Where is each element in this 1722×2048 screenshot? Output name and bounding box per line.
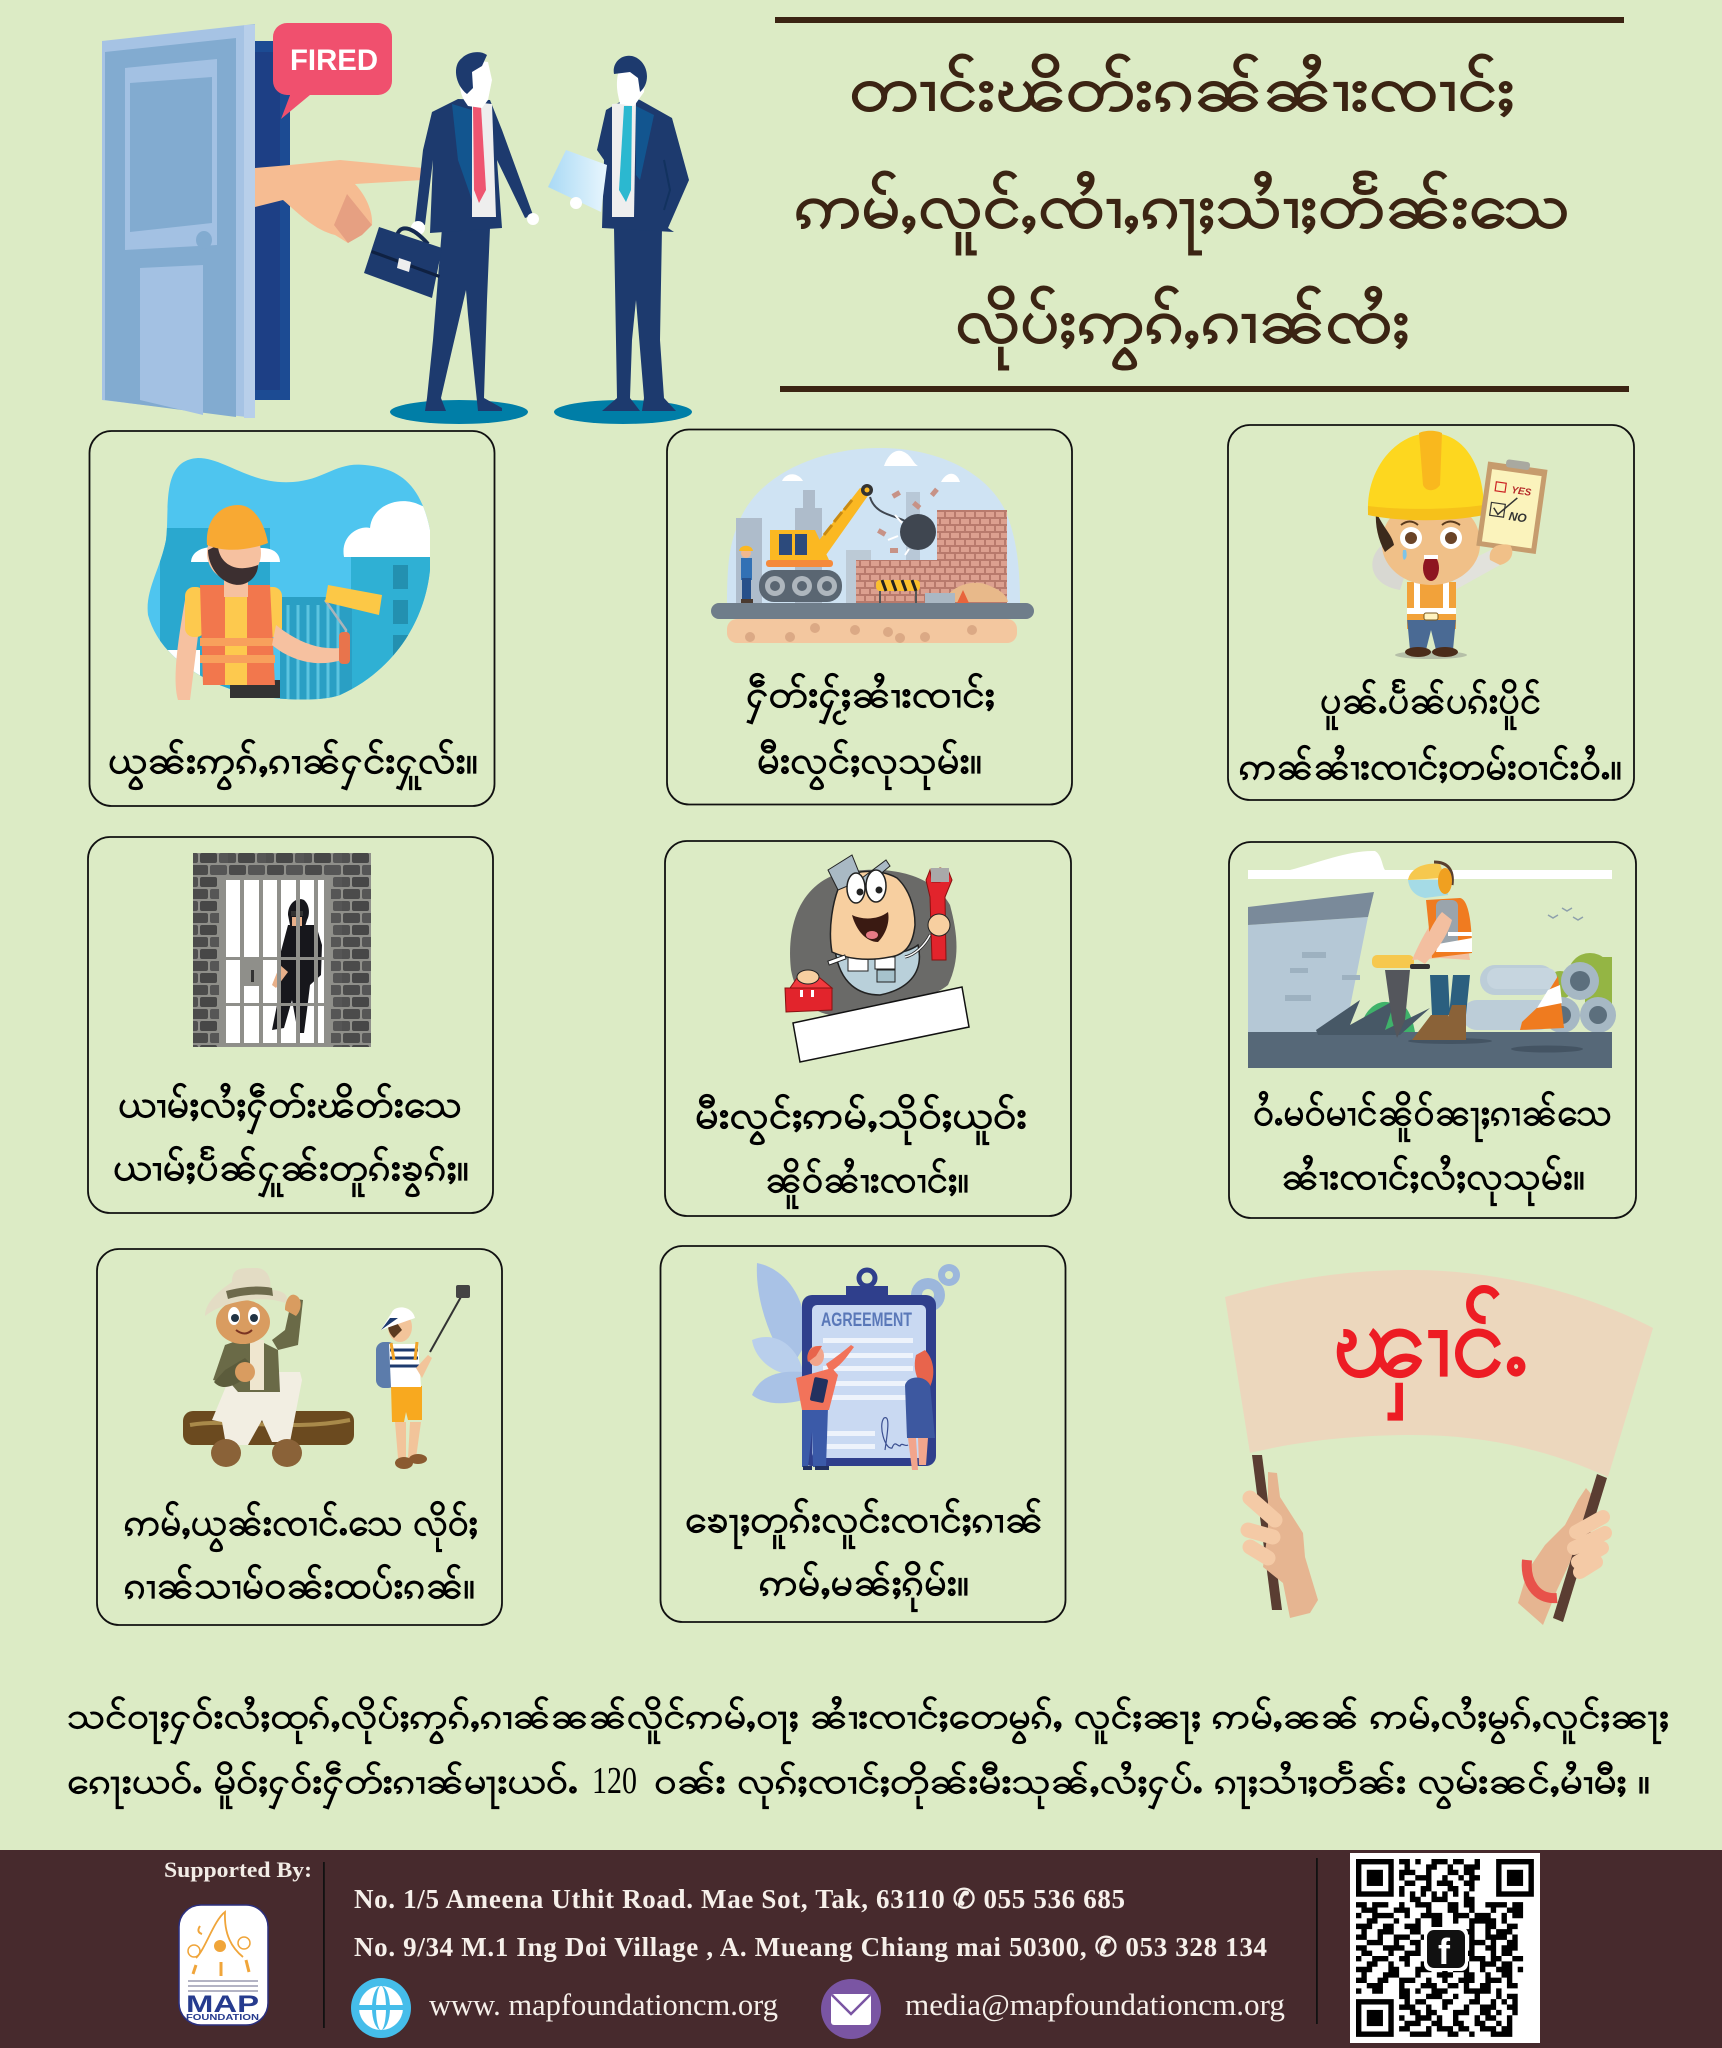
speech bubble: FIRED: FIRED <box>290 44 378 77</box>
icon: crying worker with yes no clipboard: YES <box>1511 485 1532 499</box>
right hand and pole <box>1518 1474 1607 1625</box>
left hand and pole <box>1248 1455 1318 1618</box>
text block: conclusion paragraph <box>67 1695 1669 1810</box>
speech bubble: FIRED <box>273 23 392 119</box>
banner cloth <box>1225 1270 1653 1477</box>
caption <box>113 1082 469 1198</box>
panel: rule breaking worker <box>1228 425 1634 800</box>
caption: ဢၼ်ၼၢႆးၸၢင်ႈတမ်းဝၢင်းဝႆႉ။ <box>1239 744 1622 788</box>
icon: demolition site <box>711 448 1034 643</box>
panel: prison <box>88 837 493 1213</box>
caption <box>695 1093 1027 1210</box>
panel: demolition <box>667 430 1072 804</box>
panel: explorer and tourist <box>97 1249 502 1625</box>
caption <box>1253 1090 1612 1207</box>
icon: plumber with wrench and toolbox <box>785 855 969 1062</box>
caption: မီးလွင်ႈဢမ်ႇသိုဝ်ႈယူဝ်း <box>695 1093 1027 1146</box>
address lines: No. 9/34 M.1 Ing Doi Village , A. Mueang Chiang mai 50300, ✆ 053 328 134 <box>354 1932 1267 1962</box>
caption: ယွၼ်းဢွၵ်ႇၵၢၼ်ႁင်းႁူလ်း။ <box>108 738 478 791</box>
caption: ႁဵတ်းႁႂ်ႈၼၢႆးၸၢင်ႈ <box>746 672 995 725</box>
logo: MAP Foundation: MAP <box>186 1991 259 2018</box>
caption: ၼိူဝ်ၼၢႆးၸၢင်ႈ။ <box>765 1157 969 1210</box>
QR code <box>1350 1853 1540 2043</box>
caption: ၶေႃႈတူၵ်းလူင်းၸၢင်ႈၵၢၼ် <box>685 1497 1043 1550</box>
panel: agreement <box>660 1246 1066 1622</box>
text block: conclusion paragraph: 120 <box>592 1760 637 1802</box>
banner word: ၾၢင်ႉ <box>1333 1284 1528 1421</box>
panel: roadwork <box>1229 842 1636 1218</box>
caption: ၼၢႆးၸၢင်ႈလႆႈလုသုမ်း။ <box>1281 1154 1585 1207</box>
address lines: No. 1/5 Ameena Uthit Road. Mae Sot, Tak, 63110 ✆ 055 536 685 <box>354 1884 1125 1914</box>
caption: ယၢမ်ႈပႅၼ်ႁူၼ်းတူၵ်းၶွၵ်ႈ။ <box>113 1145 469 1198</box>
panel: plumber <box>665 841 1071 1216</box>
door frame <box>255 41 290 400</box>
caption: ဝႆႉမဝ်မၢင်ၼိူဝ်ၼႃႈၵၢၼ်သေ <box>1253 1090 1612 1143</box>
title rules and heading <box>775 17 1629 392</box>
heading text: ဢမ်ႇလူင်ႇၸၢႆႇၵႃႈသၢႆႈတႅၼ်းသေ <box>794 170 1570 255</box>
icon: agreement clipboard with two people <box>752 1263 960 1470</box>
caption <box>685 1497 1043 1613</box>
caption <box>124 1500 478 1607</box>
illustration: fired employee pointed out of the door <box>102 23 692 424</box>
icon: painter worker <box>148 458 432 708</box>
address lines <box>354 1884 1267 1962</box>
panel: warning banner held by hands <box>1225 1270 1653 1625</box>
text block: conclusion paragraph: ဝၼ်း လုၵ်ႈၸၢင်ႈတိုၼ်းမီးသုၼ်ႇလႆႈႁပ်ႉ ၵႃႈသၢႆႈတႅၼ်း လွမ်းၼင်ႇမၢႆမီႈ ။ <box>654 1760 1650 1810</box>
pointing hand <box>255 160 423 243</box>
heading text: တၢင်းၽိတ်းၵၼ်ၼၢႆးၸၢင်ႈ <box>849 53 1515 124</box>
logo: MAP Foundation: FOUNDATION <box>186 2013 259 2022</box>
icon: crying worker with yes no clipboard: NO <box>1508 509 1528 525</box>
panel: painter <box>90 431 494 806</box>
icon: roadworker with jackhammer <box>1248 851 1616 1068</box>
icon: agreement clipboard with two people: AGREEMENT <box>821 1310 912 1331</box>
icon: tourist taking selfie <box>376 1285 470 1469</box>
caption: ၵၢၼ်သၢမ်ဝၼ်းထပ်းၵၼ်။ <box>124 1563 475 1607</box>
icon: thief behind prison bars <box>193 853 371 1047</box>
man with blue tie and document <box>548 56 692 424</box>
briefcase <box>364 227 442 298</box>
man with red tie and briefcase <box>390 52 539 424</box>
icon: crying worker with yes no clipboard <box>1368 431 1548 659</box>
facebook mark: f <box>1438 1931 1451 1972</box>
supported by label: Supported By: <box>164 1857 312 1882</box>
caption: ယၢမ်ႈလႆႈႁဵတ်းၽိတ်းသေ <box>118 1082 462 1135</box>
facebook mark <box>1424 1927 1468 1972</box>
text block: conclusion paragraph: သင်ဝႃႈႁဝ်းလႆႈထုၵ်ႇလိုပ်ႈဢွၵ်ႇၵၢၼ်ၼၼ်လိူင်ဢမ်ႇဝႃႈ ၼၢႆးၸၢင်ႈတေမွၵ်ႇ လူင်ႈၼႃႈ ဢမ်ႇၼၼ် ဢမ်ႇလႆႈမွၵ်ႇလူင်ႈၼႃႈ <box>67 1695 1669 1745</box>
caption: မီးလွင်ႈလုသုမ်း။ <box>757 738 982 791</box>
website: www. mapfoundationcm.org <box>429 1987 778 2022</box>
heading text: လိုပ်ႈဢွၵ်ႇၵၢၼ်ၸႆႈ <box>955 285 1410 370</box>
icon: explorer sitting on log <box>183 1268 354 1467</box>
footer <box>0 1850 1722 2048</box>
icon: envelope <box>821 1979 881 2039</box>
email: media@mapfoundationcm.org <box>905 1987 1285 2022</box>
caption: ဢမ်ႇယွၼ်းၸၢင်ႉသေ လိုဝ်ႈ <box>124 1500 478 1553</box>
caption <box>746 672 995 791</box>
logo: MAP Foundation <box>179 1905 268 2025</box>
text block: conclusion paragraph: ၵေႃးယဝ်ႉ မိူဝ်ႈႁဝ်းႁဵတ်းၵၢၼ်မႃးယဝ်ႉ <box>67 1760 578 1810</box>
caption <box>1239 678 1622 788</box>
icon: globe <box>351 1978 411 2038</box>
caption: ပူၼ်ႉပႅၼ်ပၵ်းပိူင် <box>1320 678 1541 731</box>
caption: ဢမ်ႇမၼ်ႈၵိုမ်း။ <box>759 1560 969 1613</box>
door <box>102 24 255 418</box>
heading text <box>794 53 1570 370</box>
